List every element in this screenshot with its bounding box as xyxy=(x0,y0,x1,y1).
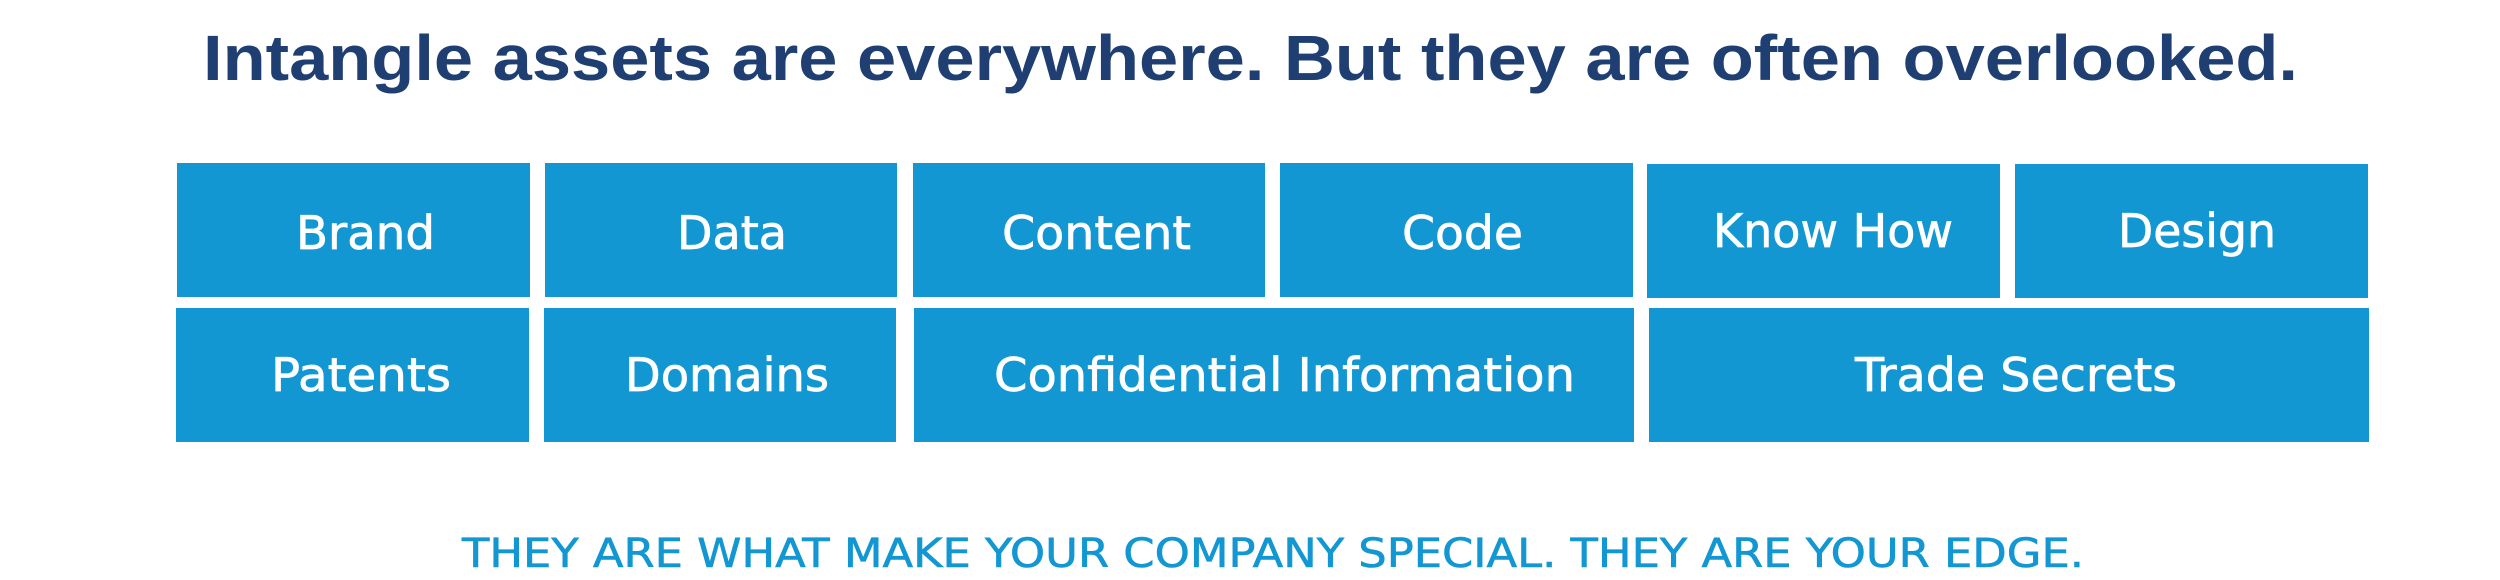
tile: Content xyxy=(913,163,1265,297)
tile: Domains xyxy=(544,308,896,442)
tile: Code: Code xyxy=(1402,206,1523,260)
tile: Data xyxy=(545,163,897,297)
tile: Design: Design xyxy=(2118,204,2276,258)
tile: Data: Data xyxy=(677,206,787,260)
tile grid xyxy=(176,163,2369,442)
tile: Brand xyxy=(177,163,530,297)
tile: Content: Content xyxy=(1002,206,1191,260)
tile: Patents: Patents xyxy=(271,348,451,402)
tile: Brand: Brand xyxy=(296,206,435,260)
tile: Code xyxy=(1280,163,1633,297)
tile: Know How xyxy=(1647,164,2000,298)
title: Intangle assets are everywhere. But they are often overlooked. xyxy=(203,22,2298,94)
tile: Design xyxy=(2015,164,2368,298)
tile: Know How: Know How xyxy=(1713,204,1953,258)
tile: Confidential Information xyxy=(914,308,1634,442)
tile: Domains: Domains xyxy=(625,348,829,402)
tile: Trade Secrets xyxy=(1649,308,2369,442)
footer tagline: THEY ARE WHAT MAKE YOUR COMPANY SPECIAL. THEY ARE YOUR EDGE. xyxy=(461,531,2084,577)
tile: Trade Secrets: Trade Secrets xyxy=(1854,348,2177,402)
tile: Confidential Information: Confidential Information xyxy=(994,348,1575,402)
tile: Patents xyxy=(176,308,529,442)
